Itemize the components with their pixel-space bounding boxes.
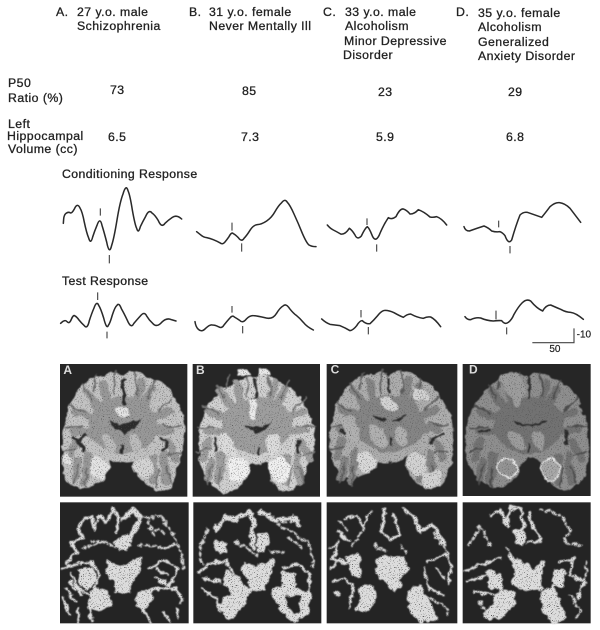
header D: Generalized [478,35,549,49]
header D [456,5,575,63]
segmented panel A [60,502,189,623]
segmented panel B [193,502,321,623]
heading: test response: Test Response [62,274,149,288]
header B: Never Mentally Ill [209,19,311,33]
header B [189,5,311,33]
header A: 27 y.o. male [77,5,148,19]
scale bar [532,328,592,355]
header D: D. [456,5,469,19]
subject headers [56,5,575,63]
P50 ratio row [8,76,523,105]
panel letter D: D [469,362,478,376]
panel letter C: C [331,362,340,376]
P50 ratio row: P50 [8,76,31,90]
header A [56,5,161,33]
left hippocampal volume row: Hippocampal [7,129,84,143]
trace: D conditioning [464,203,581,253]
header C: Disorder [343,48,393,62]
segmented panel C [327,502,457,623]
left hippocampal volume row: 7.3 [241,130,259,144]
MRI panel C [327,362,457,497]
MRI panels C and D [327,362,591,623]
P50 ratio row: Ratio (%) [8,91,63,105]
P50 ratio row: 73 [110,83,125,97]
header B: 31 y.o. female [209,5,292,19]
left hippocampal volume row: Volume (cc) [8,142,78,156]
left hippocampal volume row: 6.8 [506,130,524,144]
header D: Anxiety Disorder [478,49,575,63]
header A: Schizophrenia [77,19,161,33]
evoked response traces C and D [322,203,592,355]
MRI panel D [463,362,591,496]
left hippocampal volume row [7,117,524,156]
header A: A. [56,5,69,19]
left hippocampal volume row: 6.5 [108,130,126,144]
header C: Minor Depressive [344,34,447,48]
MRI panel B [193,363,320,497]
header C [323,5,447,62]
P50 ratio row: 29 [508,85,523,99]
trace: A test [61,292,176,338]
MRI panel A [60,363,187,497]
left hippocampal volume row: Left [8,117,30,131]
header D: Alcoholism [478,20,542,34]
header C: 33 y.o. male [345,5,416,19]
trace: A conditioning [63,188,182,263]
trace: B test [195,305,313,333]
evoked response traces A and B [61,188,316,338]
P50 ratio row: 23 [378,85,393,99]
header B: B. [189,5,202,19]
MRI panels A and B [60,363,321,623]
panel letter B: B [196,363,205,377]
scale bar: -10 [577,329,592,340]
panel letter A: A [63,363,72,377]
left hippocampal volume row: 5.9 [376,130,394,144]
segmented panel D [463,502,591,623]
trace: D test [465,300,583,334]
header C: Alcoholism [345,19,409,33]
heading: conditioning response: Conditioning Response [62,167,198,181]
P50 ratio row: 85 [242,84,257,98]
trace: C test [322,310,441,334]
trace: C conditioning [327,209,447,252]
header D: 35 y.o. female [478,6,561,20]
scale bar: 50 [549,344,561,355]
trace: B conditioning [197,200,316,252]
header C: C. [323,5,336,19]
